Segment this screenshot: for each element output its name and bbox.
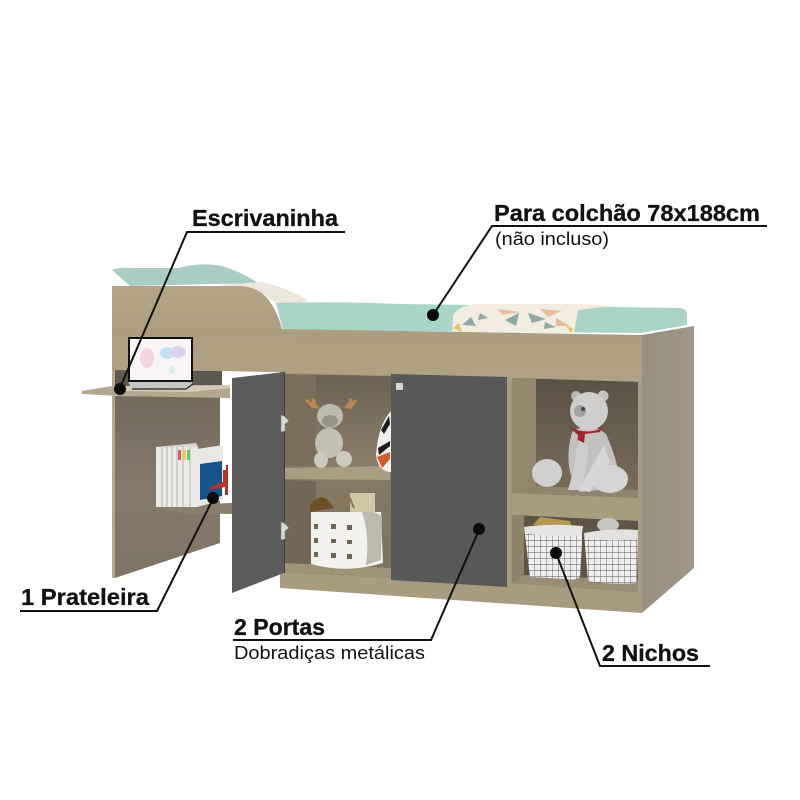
callout: Para colchão [427,200,767,321]
metal hinges [281,415,289,540]
basket left [524,517,583,580]
desk top [82,385,230,398]
patterned pillow sham [218,282,308,306]
furniture illustration: loft bed [82,264,694,613]
callout: 2 Nichos [550,547,710,666]
right closed door [391,374,507,587]
callout: 2 Portas [233,523,485,663]
cabinet base and centre body [280,372,642,613]
open cabinet interior [284,374,392,578]
zebra cushion [376,411,391,472]
callout: 1 Prateleira: 1 Prateleira [21,584,149,610]
callout: Escrivaninha: Escrivaninha [192,205,338,231]
callout: 2 Portas: 2 Portas [234,614,325,640]
mattress [276,302,687,333]
right side panel [642,326,694,613]
round basket and toys [310,493,383,569]
callout: Para colchão: (não incluso) [495,229,609,249]
lower niche [512,515,638,592]
callout: Escrivaninha [114,205,345,395]
dark wall behind desk [115,370,222,388]
callout: Para colchão: Para colchão 78x188cm [494,200,760,226]
callout: 1 Prateleira [20,492,219,611]
basket right [584,518,638,584]
patterned blanket [452,304,612,333]
upper niche [512,378,638,498]
callout: 2 Nichos: 2 Nichos [602,640,699,666]
lower shelf [153,503,232,514]
door handle [396,383,403,390]
callout: 2 Portas: Dobradiças metálicas [234,643,425,663]
pillow [112,264,258,286]
laptop [128,337,193,389]
books [156,443,228,507]
left open door [232,372,285,593]
plush moose [305,398,357,468]
plush bear [532,390,628,493]
left desk support panel [112,396,220,578]
headboard and front rail [112,286,642,380]
